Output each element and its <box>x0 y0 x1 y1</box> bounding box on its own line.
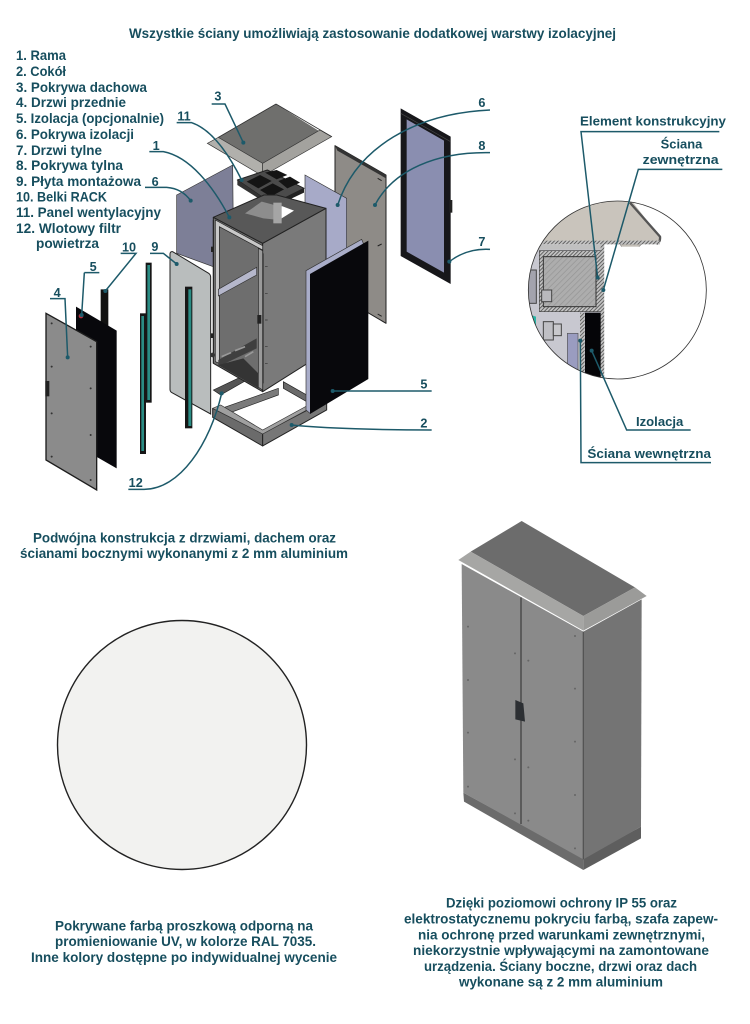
parts legend <box>16 47 164 251</box>
front doors <box>462 564 583 859</box>
leader lines and numbers <box>50 90 490 490</box>
base frame <box>213 382 327 446</box>
label: sciana zewnetrzna: Ściana <box>661 137 703 152</box>
parts legend: 11. Panel wentylacyjny <box>16 204 161 220</box>
right insulation panel <box>306 239 368 414</box>
section drawing <box>528 201 662 378</box>
rear door <box>401 108 452 284</box>
leader lines and numbers: 1 <box>153 139 160 153</box>
circle outline <box>528 201 706 379</box>
parts legend: 5. Izolacja (opcjonalnie) <box>16 110 164 126</box>
parts legend: 3. Pokrywa dachowa <box>16 79 147 95</box>
roof <box>458 521 647 631</box>
text: powder coating: Inne kolory dostępne po indywidualnej wycenie <box>31 949 337 965</box>
parts legend: 12. Wlotowy filtr <box>16 220 122 236</box>
label: sciana zewnetrzna: zewnętrzna <box>643 153 720 167</box>
label: element konstrukcyjny: Element konstrukcyjny <box>580 114 726 128</box>
parts legend: 1. Rama <box>16 47 66 63</box>
text: double construction <box>20 530 348 561</box>
parts legend: 9. Płyta montażowa <box>16 173 141 189</box>
text: IP 55 protection: elektrostatycznemu pokryciu farbą, szafa zapew- <box>404 910 718 926</box>
leader lines and numbers: 5 <box>90 260 97 274</box>
front door <box>45 313 97 490</box>
paint sample circle <box>58 620 306 870</box>
parts legend: 2. Cokół <box>16 63 66 79</box>
rack rail on plate <box>185 287 192 428</box>
leader lines and numbers: 3 <box>214 90 221 104</box>
leader lines and numbers: 10 <box>122 240 136 254</box>
parts legend: 4. Drzwi przednie <box>16 94 126 110</box>
right insulation cover <box>305 175 347 267</box>
cabinet frame <box>210 195 326 392</box>
text: IP 55 protection <box>404 894 718 990</box>
label: izolacja <box>590 349 691 430</box>
left insulation cover <box>177 165 233 267</box>
leader lines and numbers: 9 <box>151 240 158 254</box>
red marker <box>79 314 83 318</box>
text: IP 55 protection: Dzięki poziomowi ochrony IP 55 oraz <box>446 894 677 910</box>
text: powder coating: promieniowanie UV, w kolorze RAL 7035. <box>55 933 316 949</box>
text: double construction: ścianami bocznymi wykonanymi z 2 mm aluminium <box>20 545 348 561</box>
leader lines and numbers: 7 <box>478 235 485 249</box>
assembled cabinet <box>458 521 647 870</box>
air inlet filter <box>213 373 253 395</box>
left insulation panel <box>76 307 117 468</box>
text: powder coating <box>31 918 337 965</box>
text: IP 55 protection: nia ochronę przed warunkami zewnętrznymi, <box>418 926 705 942</box>
text: powder coating: Pokrywane farbą proszkową odporną na <box>55 918 313 934</box>
label: sciana wewnetrzna <box>578 339 712 463</box>
label: sciana wewnetrzna: Ściana wewnętrzna <box>587 446 712 461</box>
parts legend: 6. Pokrywa izolacji <box>16 126 134 142</box>
leader lines and numbers: 12 <box>129 476 143 490</box>
rack rails <box>101 263 152 454</box>
text: double construction: Podwójna konstrukcja z drzwiami, dachem oraz <box>33 530 336 546</box>
leader lines and numbers: 11 <box>177 110 191 124</box>
roof cover <box>207 104 332 176</box>
label: sciana zewnetrzna <box>601 137 722 292</box>
leader lines and numbers: 8 <box>478 139 485 153</box>
leader lines and numbers: 5 <box>420 378 427 392</box>
ventilation panel <box>237 170 304 207</box>
leader lines and numbers: 2 <box>420 417 427 431</box>
leader lines and numbers: 4 <box>54 286 61 300</box>
exploded cabinet diagram <box>45 90 490 490</box>
label: izolacja: Izolacja <box>636 415 684 429</box>
base <box>463 793 641 870</box>
rear cover <box>335 146 386 323</box>
parts legend: 10. Belki RACK <box>16 188 107 204</box>
side wall <box>583 599 642 859</box>
parts legend: 7. Drzwi tylne <box>16 142 102 158</box>
text: IP 55 protection: urządzenia. Ściany boczne, drzwi oraz dach <box>424 957 697 974</box>
text: IP 55 protection: niekorzystnie wpływającymi na zamontowane <box>413 942 709 958</box>
text: IP 55 protection: wykonane są z 2 mm aluminium <box>458 974 663 990</box>
mounting plate <box>170 252 211 414</box>
leader lines and numbers: 6 <box>478 96 485 110</box>
parts legend: 8. Pokrywa tylna <box>16 157 123 173</box>
label: element konstrukcyjny <box>580 114 726 280</box>
detail section circle <box>523 114 726 463</box>
parts legend: powietrza <box>36 235 99 251</box>
leader lines and numbers: 6 <box>152 175 159 189</box>
title: Wszystkie ściany umożliwiają zastosowanie dodatkowej warstwy izolacyjnej <box>129 25 616 41</box>
